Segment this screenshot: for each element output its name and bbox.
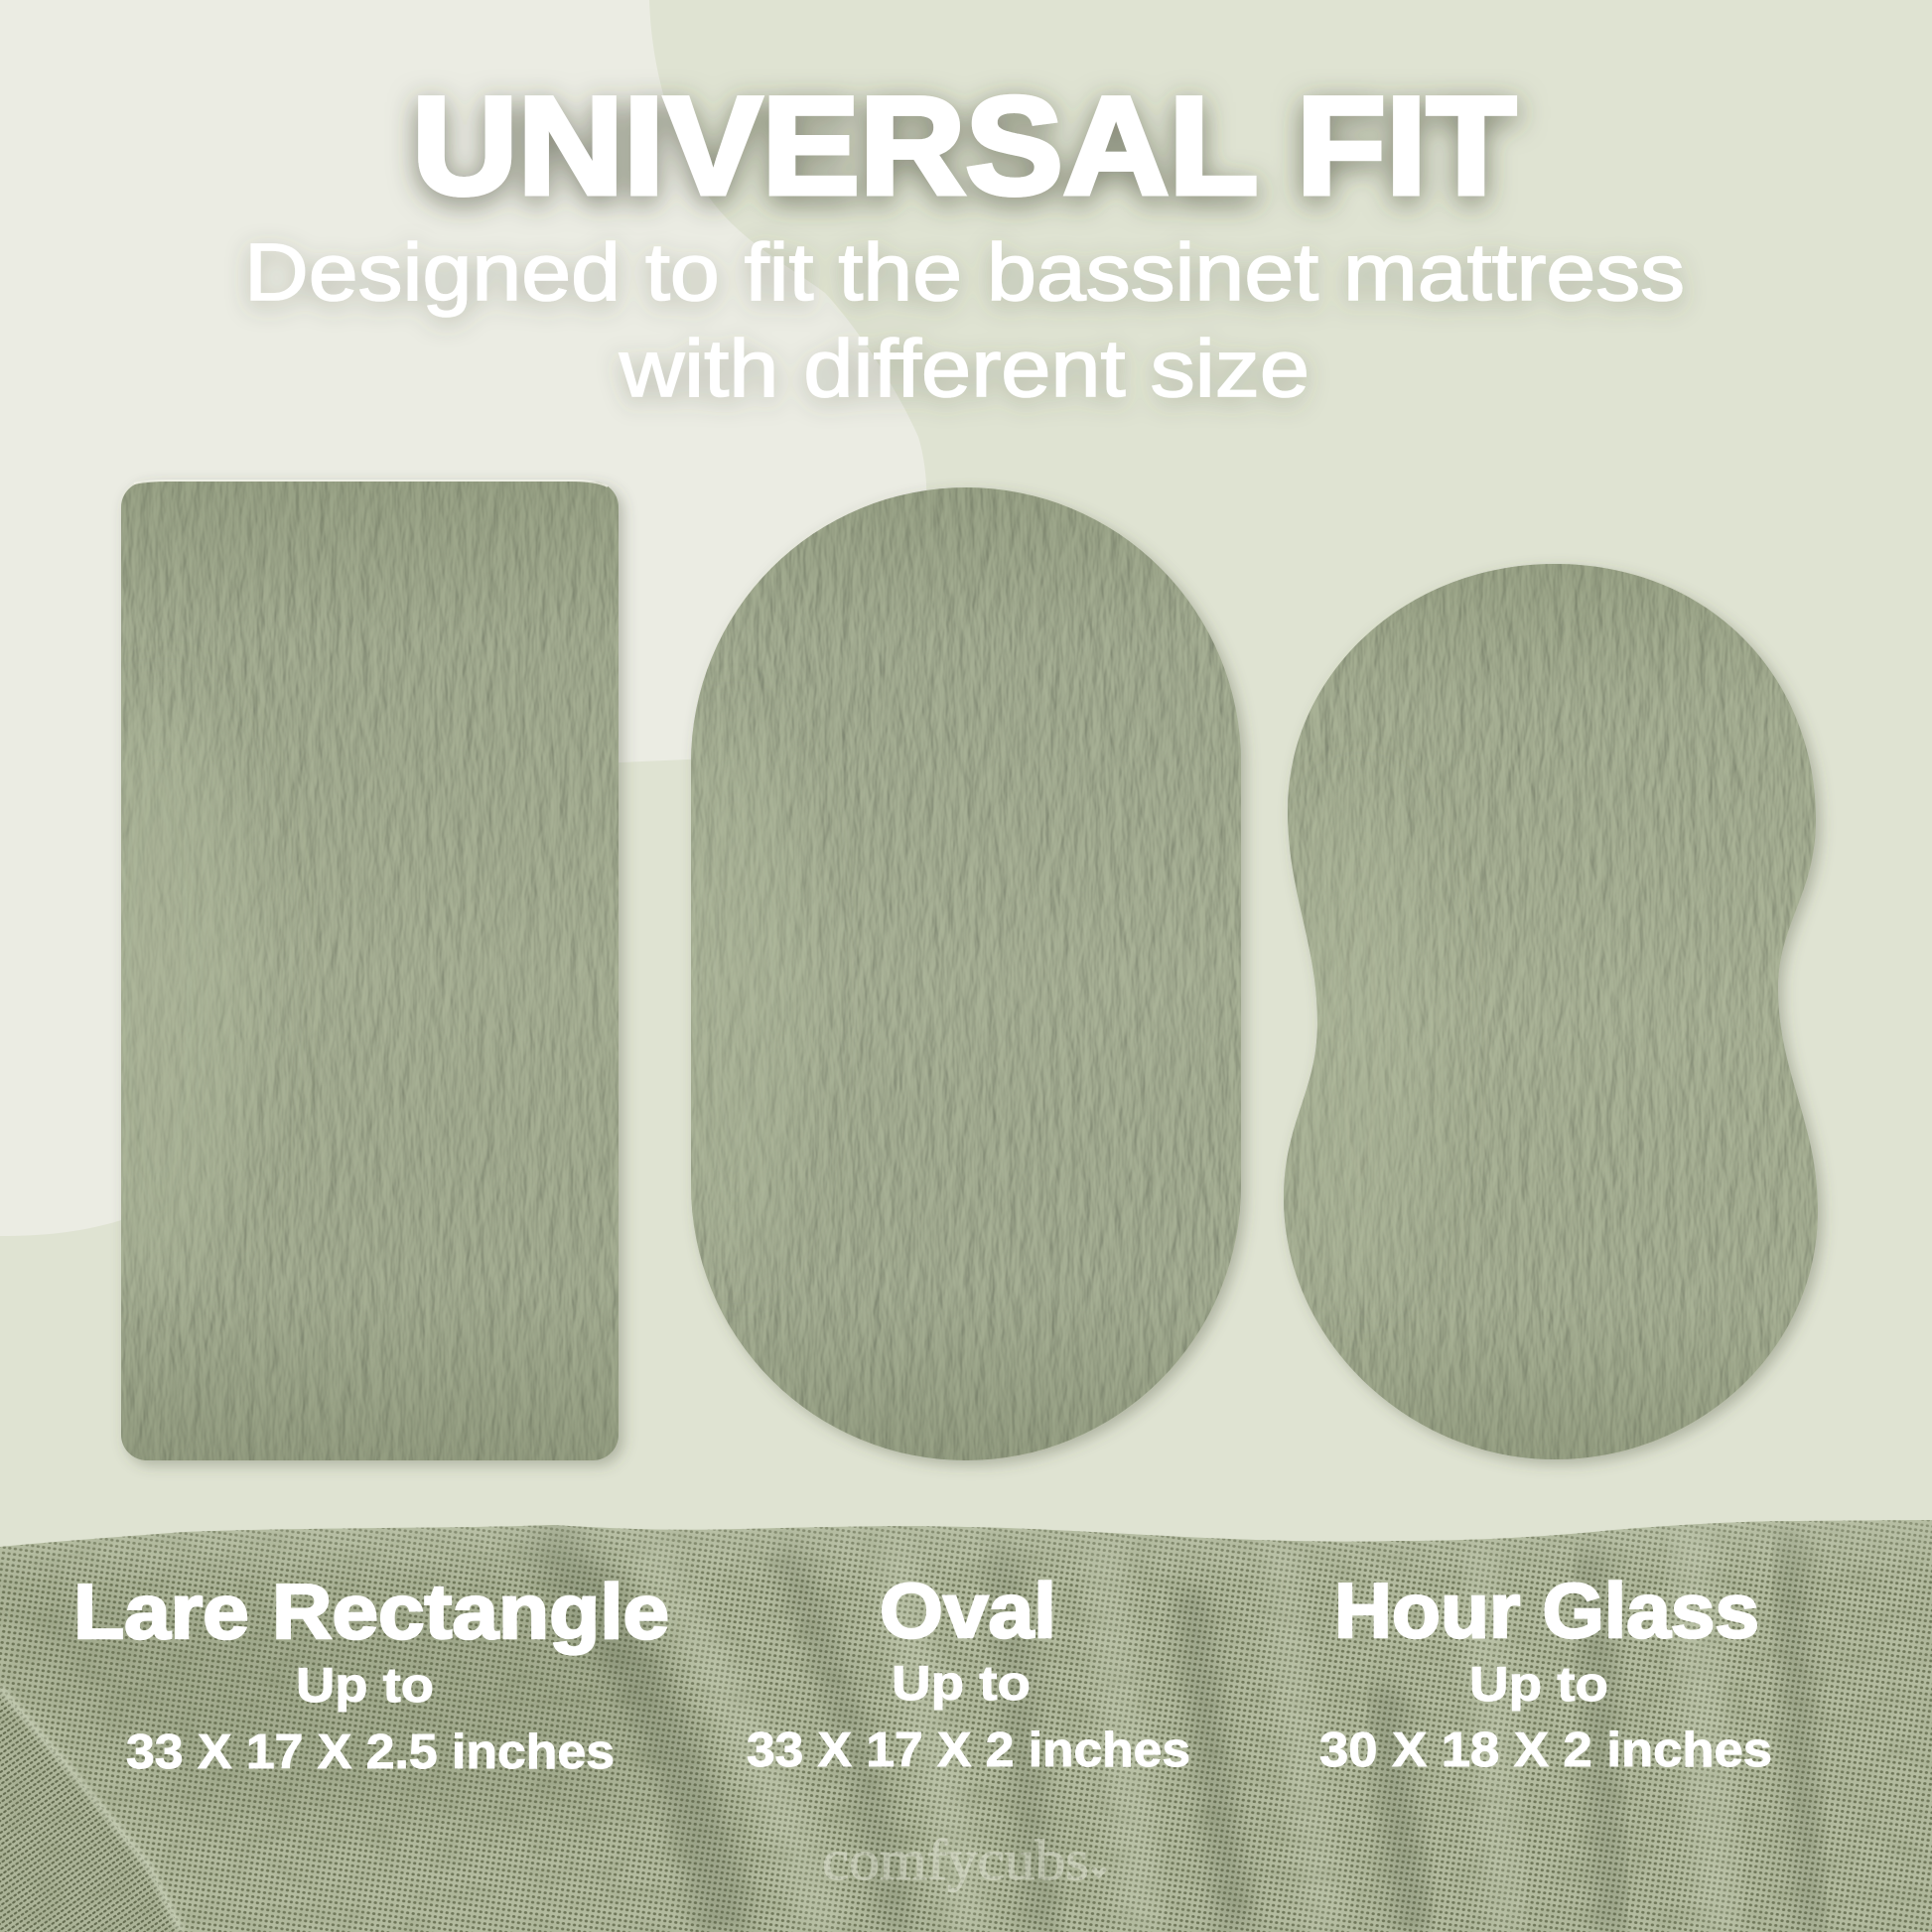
- subtitle: with different size: [619, 324, 1310, 414]
- label: hour glass: Up to: [1469, 1658, 1608, 1712]
- oval fabric texture: [655, 487, 1241, 1460]
- subtitle: Designed to fit the bassinet mattress: [244, 227, 1685, 318]
- fabric: fold shading: [0, 1517, 1932, 1932]
- panel: oval mattress: [655, 487, 1241, 1460]
- fabric: diagonal fold at left: [0, 1688, 182, 1932]
- label: large rectangle: [73, 1568, 669, 1779]
- panel: muslin fabric strip: [0, 1514, 1932, 1932]
- rectangle top highlight: [134, 481, 608, 486]
- label: oval: 33 X 17 X 2 inches: [747, 1724, 1190, 1777]
- label: large rectangle: 33 X 17 X 2.5 inches: [126, 1725, 615, 1779]
- background: light blob: [0, 0, 926, 1236]
- subtitle: [244, 227, 1685, 414]
- label: large rectangle: Up to: [296, 1659, 434, 1713]
- label: oval: Oval: [880, 1567, 1056, 1654]
- label: hour glass: Hour Glass: [1334, 1567, 1759, 1654]
- label: oval: Up to: [892, 1657, 1031, 1711]
- panel: hourglass mattress: [1281, 561, 1822, 1462]
- panel: large rectangle mattress: [60, 481, 619, 1460]
- label: hour glass: 30 X 18 X 2 inches: [1319, 1724, 1772, 1777]
- rectangle fabric texture: [121, 482, 619, 1460]
- label: hour glass: [1319, 1567, 1772, 1777]
- label: large rectangle: Lare Rectangle: [73, 1568, 669, 1655]
- title: UNIVERSAL FIT: [412, 68, 1516, 223]
- logo: comfycubs: comfycubs: [822, 1828, 1089, 1892]
- label: oval: [747, 1567, 1190, 1777]
- hourglass fabric texture: [1281, 561, 1822, 1462]
